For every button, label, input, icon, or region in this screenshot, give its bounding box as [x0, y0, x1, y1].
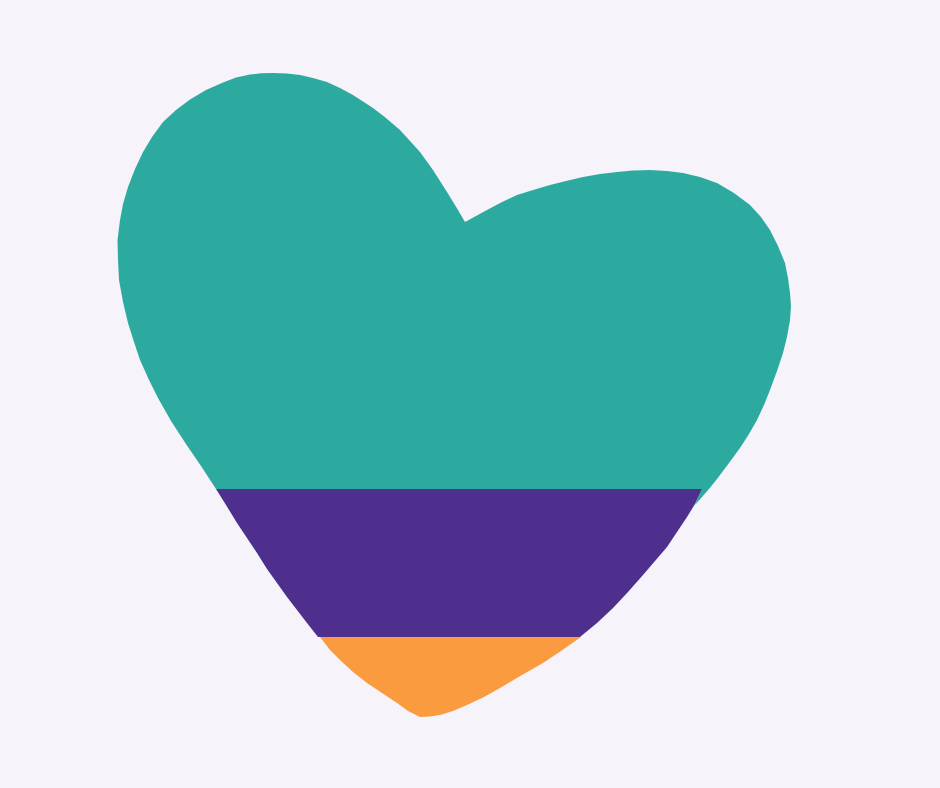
- heart: [118, 73, 791, 717]
- band: purple: [216, 489, 702, 637]
- band: orange: [320, 637, 581, 717]
- band: teal: [118, 73, 791, 505]
